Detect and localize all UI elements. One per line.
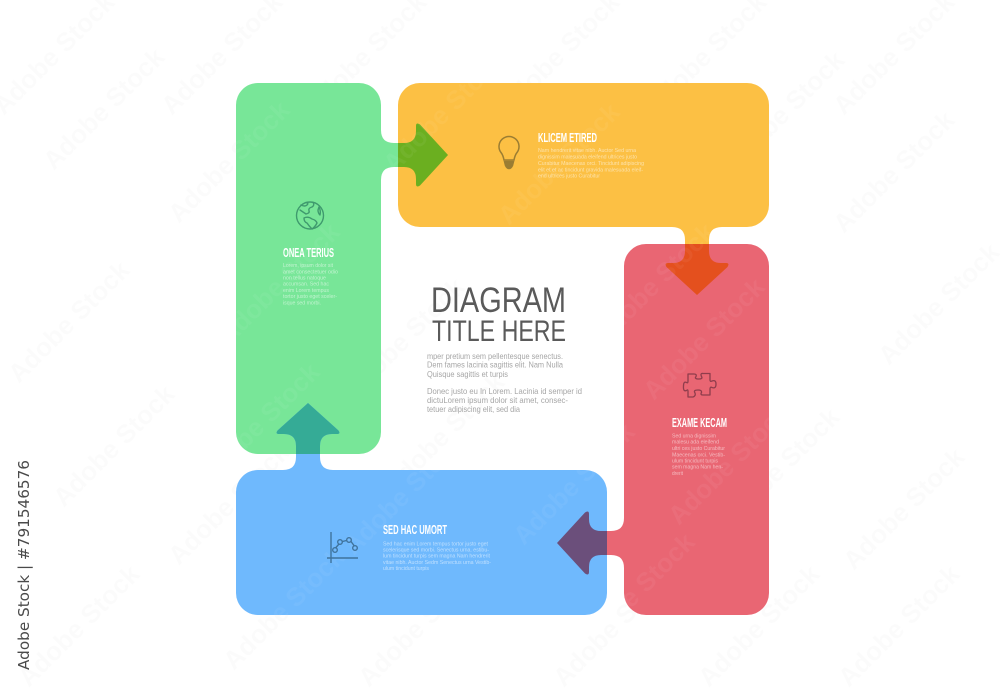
text block: Exame Kecam: sem magna Nam hen- xyxy=(672,465,723,471)
text block: Exame Kecam: ulum tincidunt turpis xyxy=(672,459,718,465)
watermark layer over cards: Adobe Stock xyxy=(162,94,296,228)
text block: Onea Terius xyxy=(283,246,338,306)
watermark layer on white background: Adobe Stock xyxy=(162,436,296,570)
text block: Sed Hac Umort: ulum tincidunt turpis xyxy=(383,566,429,572)
text block: centre description: Donec justo eu In Lorem. Lacinia id semper id xyxy=(427,386,582,396)
watermark layer on white background: Adobe Stock xyxy=(47,378,181,512)
watermark layer on white background: Adobe Stock xyxy=(162,94,296,228)
text block: centre description: Quisque sagittis et turpis xyxy=(427,369,508,379)
text block: Klicem Etired: Curabitur Maecenas orci. Tincidunt adipiscing xyxy=(538,161,644,167)
title: DIAGRAM xyxy=(431,281,566,320)
watermark layer on white background: Adobe Stock xyxy=(547,558,681,692)
icon: globe xyxy=(296,202,324,229)
title xyxy=(431,281,566,348)
watermark layer on white background: Adobe Stock xyxy=(712,401,846,535)
watermark layer over cards: Adobe Stock xyxy=(377,44,511,178)
icon: light bulb xyxy=(499,136,519,168)
text block: centre description: tetuer adipiscing elit, sed dia xyxy=(427,404,520,414)
arrow: red into blue xyxy=(557,512,607,574)
panel: red card with arrow xyxy=(557,244,769,615)
watermark layer on white background: Adobe Stock xyxy=(12,558,146,692)
text block: centre description xyxy=(427,351,582,414)
text block: centre description: dictuLorem ipsum dolor sit amet, consec- xyxy=(427,395,568,405)
icon: puzzle piece xyxy=(683,373,716,397)
text block: Exame Kecam: drerit xyxy=(672,471,683,477)
text block: Exame Kecam: Sed urna dignissim xyxy=(672,434,716,440)
text block: Klicem Etired: dignissim malesuada eleifend ultrices justo xyxy=(538,155,637,161)
text block: Onea Terius: isque sed morbi. xyxy=(283,300,321,306)
watermark layer over cards: Adobe Stock xyxy=(662,396,796,530)
text block: Onea Terius: non tellus natoque xyxy=(283,276,326,282)
text block: Klicem Etired xyxy=(538,131,644,180)
text block: Exame Kecam: ultri ces justo Curabitur xyxy=(672,446,725,452)
watermark layer on white background: Adobe Stock xyxy=(352,558,486,692)
panel: yellow card with arrow xyxy=(398,83,769,295)
title: TITLE HERE xyxy=(432,315,566,348)
text block: centre description: Dem fames lacinia sagittis elit. Nam Nulla xyxy=(427,360,563,370)
text block: Sed Hac Umort: scelerisque sed morbi. Senectus urna. estibu- xyxy=(383,547,489,553)
watermark layer over cards: Adobe Stock xyxy=(637,271,771,405)
watermark layer on white background: Adobe Stock xyxy=(37,41,171,175)
text block: Onea Terius: tortor justo eget sceler- xyxy=(283,294,337,300)
watermark layer over cards: Adobe Stock xyxy=(192,356,326,490)
text block: Exame Kecam: Maecenas orci. Vestib- xyxy=(672,452,725,458)
watermark layer on white background: Adobe Stock xyxy=(377,366,511,500)
text block: centre description: mper pretium sem pellentesque senectus. xyxy=(427,351,563,361)
text block: Klicem Etired: elit et et ac tincidunt gravida malesuada eleif- xyxy=(538,167,643,173)
watermark layer over cards: Adobe Stock xyxy=(337,426,471,560)
watermark layer over cards: Adobe Stock xyxy=(217,541,351,675)
text block: Onea Terius: Lorem, ipsum dolor sit xyxy=(283,263,333,269)
watermark layer on white background: Adobe Stock xyxy=(337,271,471,405)
arrow: green into yellow xyxy=(398,124,448,186)
arrow: blue into green xyxy=(277,403,339,454)
text block: Exame Kecam: malesu ada eleifend xyxy=(672,440,719,446)
text block: Klicem Etired: Nam hendrerit vitae nibh. Auctor Sed urna xyxy=(538,148,637,154)
text block: Onea Terius: ONEA TERIUS xyxy=(283,246,334,260)
watermark layer on white background: Adobe Stock xyxy=(837,441,971,575)
stock credit: Adobe Stock | #791546576 xyxy=(15,460,33,670)
watermark layer on white background: Adobe Stock xyxy=(692,558,826,692)
panel: green card with arrow xyxy=(236,83,448,454)
arrow: yellow into red xyxy=(666,244,728,295)
watermark layer on white background: Adobe Stock xyxy=(832,558,966,692)
watermark layer over cards: Adobe Stock xyxy=(507,416,641,550)
text block: Klicem Etired: end ultrices justo Curabitur xyxy=(538,174,600,180)
text block: Sed Hac Umort: vitae nibh. Auctor Sedm Senectus urna Vestib- xyxy=(383,560,491,566)
text block: Sed Hac Umort: lum tincidunt turpis sem magna Nam hendrerit xyxy=(383,554,490,560)
text block: Sed Hac Umort: Sed hac enim Lorem tempus tortor justo eget xyxy=(383,541,488,547)
text block: Onea Terius: amet consectetuer odio xyxy=(283,269,338,275)
watermark layer on white background: Adobe Stock xyxy=(2,254,136,388)
watermark layer over cards: Adobe Stock xyxy=(492,96,626,230)
text block: Klicem Etired: KLICEM ETIRED xyxy=(538,131,597,145)
watermark layer on white background: Adobe Stock xyxy=(717,44,851,178)
watermark layer on white background: Adobe Stock xyxy=(827,104,961,238)
text block: Sed Hac Umort xyxy=(383,523,491,572)
watermark layer over cards xyxy=(162,44,796,675)
text block: Onea Terius: accumsan. Sed hac xyxy=(283,282,329,288)
text block: Sed Hac Umort: SED HAC UMORT xyxy=(383,523,447,537)
text block: Exame Kecam xyxy=(672,416,727,477)
text block: Onea Terius: enim Lorem tempus xyxy=(283,288,329,294)
watermark layer over cards: Adobe Stock xyxy=(587,216,721,350)
watermark layer over cards: Adobe Stock xyxy=(567,526,701,660)
watermark layer on white background: Adobe Stock xyxy=(217,541,351,675)
icon: line chart xyxy=(327,532,358,563)
watermark layer over cards: Adobe Stock xyxy=(212,216,346,350)
text block: Exame Kecam: EXAME KECAM xyxy=(672,416,727,430)
panel: blue card with arrow xyxy=(236,403,607,615)
